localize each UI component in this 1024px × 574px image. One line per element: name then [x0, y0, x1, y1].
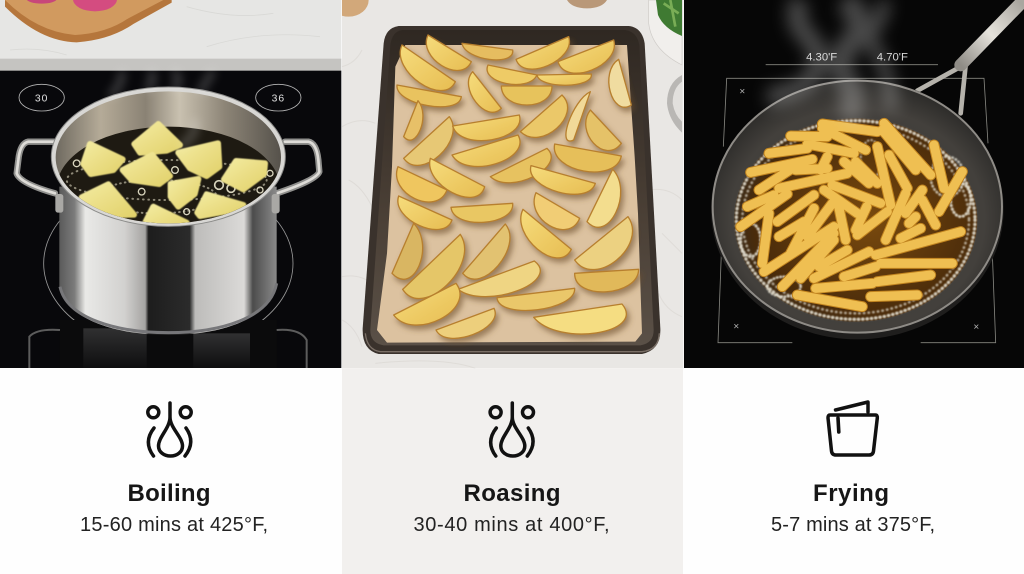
heading: Roasing: Roasing	[464, 480, 560, 507]
pot rim	[51, 87, 285, 226]
boiling water and potatoes	[60, 120, 277, 224]
potato wedges	[392, 35, 639, 338]
side dish	[667, 75, 682, 133]
pot interior wall	[56, 91, 281, 223]
pot reflection	[29, 320, 307, 368]
cooktop guide lines	[718, 65, 996, 343]
icon: boiling water drop	[148, 403, 191, 456]
display right: 36	[256, 84, 301, 111]
heading: Frying: Frying	[813, 480, 889, 507]
black cooktop	[683, 0, 1024, 368]
display left: 30: 30	[35, 93, 48, 104]
icon: frying pot	[828, 402, 877, 455]
temperature readouts: 4.30'F	[806, 51, 837, 63]
pot base lip	[60, 283, 277, 333]
baking tray	[363, 26, 660, 354]
panel: roasting info	[342, 369, 683, 574]
display left: 30	[19, 84, 64, 111]
pot handles	[17, 142, 319, 193]
marble countertop	[342, 0, 684, 369]
rising steam	[767, 0, 891, 117]
pot body	[59, 187, 277, 335]
white bowl with greens	[649, 0, 682, 65]
time and temperature: boiling: 15-60 mins at 425°F,	[80, 514, 268, 536]
panel: roasting photo	[329, 0, 684, 369]
burner ring	[43, 220, 294, 320]
heading: Boiling: Boiling	[128, 480, 210, 507]
display right: 36: 36	[272, 93, 285, 104]
oil foam	[736, 121, 975, 319]
marble countertop	[0, 0, 342, 59]
cross marks: ×	[739, 87, 745, 98]
wooden bowl top left	[342, 0, 369, 17]
handle rivets	[55, 194, 280, 213]
temperature readouts: 4.70'F	[877, 51, 908, 63]
french fries	[741, 123, 962, 307]
marble veins	[342, 50, 682, 368]
pan	[711, 79, 1004, 339]
cross marks: ×	[733, 321, 739, 332]
pan handle	[917, 3, 1021, 113]
panel: boiling info	[0, 369, 342, 574]
icon: roasting drop	[490, 403, 534, 456]
potato chunks	[82, 124, 265, 228]
panel: frying photo	[683, 0, 1024, 368]
temperature readouts	[806, 53, 908, 60]
time and temperature: roasting: 30-40 mins at 400°F,	[414, 514, 610, 536]
small dish top	[567, 0, 607, 8]
time and temperature: frying: 5-7 mins at 375°F,	[771, 514, 935, 536]
black induction cooktop	[0, 71, 342, 368]
panel: frying info	[683, 369, 1024, 574]
parchment paper	[377, 45, 642, 343]
foam bubbles	[67, 160, 273, 215]
panel: boiling photo	[0, 0, 342, 368]
hot oil	[734, 118, 977, 322]
countertop edge	[0, 59, 342, 71]
cross marks	[733, 87, 979, 333]
steam	[110, 71, 213, 147]
cross marks: ×	[973, 322, 979, 333]
cutting board with pink potatoes	[5, 0, 172, 42]
